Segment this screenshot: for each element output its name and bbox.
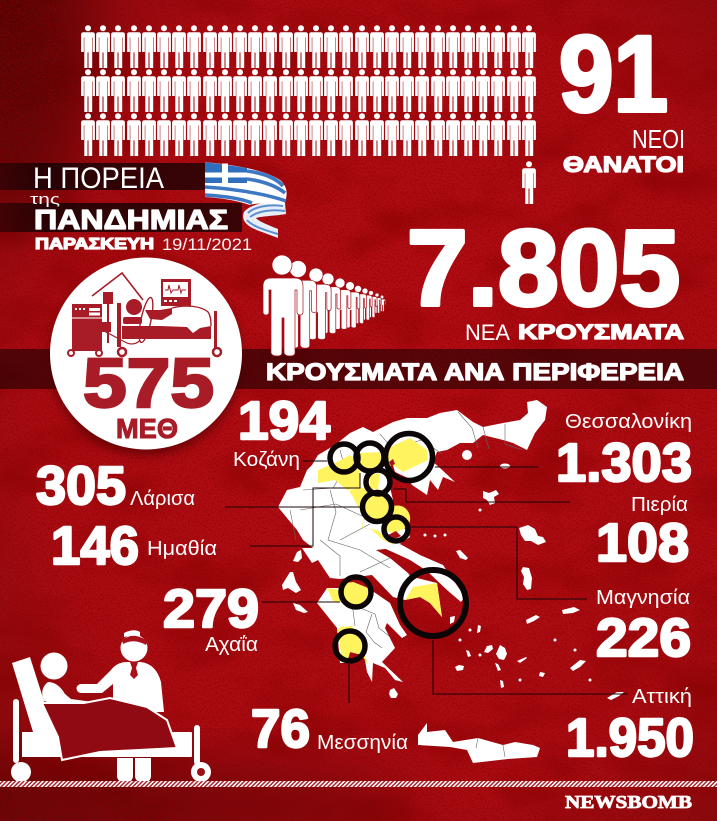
title block: της: [30, 191, 60, 208]
map of Greece: [278, 400, 624, 763]
label: Pieria: 108: [596, 513, 689, 573]
stat: new deaths: 91: [559, 13, 668, 134]
label: Messinia: Μεσσηνία: [317, 732, 408, 754]
icon: crowd queue: [263, 255, 386, 356]
regional boundaries: [290, 412, 523, 757]
row 3 of people: [81, 113, 536, 156]
islands: [282, 450, 624, 700]
title block: Η ΠΟΡΕΙΑ: [33, 162, 164, 195]
label: Attiki: Αττική: [632, 686, 692, 708]
label: ΜΕΘ: ΜΕΘ: [116, 413, 178, 444]
Peloponnese: [317, 582, 407, 682]
number: 575: 575: [83, 344, 214, 422]
label: Larisa: Λάρισα: [130, 488, 195, 510]
label: Magnisia: Μαγνησία: [596, 587, 690, 609]
label: Thessaloniki: 1.303: [556, 433, 692, 493]
label: Kozani: 194: [238, 391, 330, 451]
title block: ΠΑΡΑΣΚΕΥΗ: [35, 236, 154, 253]
leader lines: [225, 461, 628, 703]
label: Achaia: 279: [163, 579, 259, 639]
icon: Greek flag ribbon: [205, 162, 287, 238]
label: Imathia: Ημαθία: [147, 538, 217, 560]
title block: 19/11/2021: [162, 235, 252, 254]
label: Imathia: 146: [51, 516, 139, 576]
mainland: [278, 400, 547, 617]
single extra person: [522, 161, 536, 204]
stat: new deaths: ΝΕΟΙ: [632, 124, 685, 154]
panel: ICU badge: [50, 258, 242, 455]
highlight rings: [330, 434, 466, 661]
label: Achaia: Αχαΐα: [205, 634, 258, 656]
title block: [0, 162, 252, 254]
label: Larisa: 305: [36, 456, 126, 516]
stat: new cases: 7.805: [407, 207, 680, 328]
label: Thessaloniki: Θεσσαλονίκη: [565, 411, 692, 433]
label: Messinia: [251, 699, 408, 759]
label: Kozani: [233, 391, 330, 471]
row 1 of people: [81, 25, 536, 68]
stat: new deaths: ΘΑΝΑΤΟΙ: [563, 152, 684, 177]
label: Messinia: 76: [251, 699, 310, 759]
title block: ΠΑΝΔΗΜΙΑΣ: [34, 204, 228, 235]
label: Pieria: Πιερία: [631, 494, 688, 516]
label: Larisa: [36, 456, 195, 516]
heading: cases by region: ΚΡΟΥΣΜΑΤΑ ΑΝΑ ΠΕΡΙΦΕΡΕΙΑ: [266, 359, 684, 386]
label: Attiki: 1.950: [566, 708, 694, 768]
highlighted regions (yellow): [318, 438, 442, 665]
stat: new cases: ΝΕΑ: [465, 320, 510, 345]
row 2 of people: [81, 69, 536, 112]
label: Imathia: [51, 516, 217, 576]
pictogram: 91 new deaths as people: [81, 25, 536, 204]
label: Kozani: Κοζάνη: [233, 449, 300, 471]
stat: new cases: ΚΡΟΥΣΜΑΤΑ: [518, 321, 684, 344]
icon: nurse beside patient in bed: [11, 630, 211, 783]
gulf notches: [388, 459, 401, 538]
label: Magnisia: 226: [596, 608, 691, 668]
Evia: [379, 544, 465, 602]
decorative hatched strip: [0, 781, 717, 787]
logo: NEWSBOMB: NEWSBOMB: [565, 792, 692, 812]
icon: ICU bed with patient: [68, 273, 221, 356]
Crete: [418, 723, 540, 763]
